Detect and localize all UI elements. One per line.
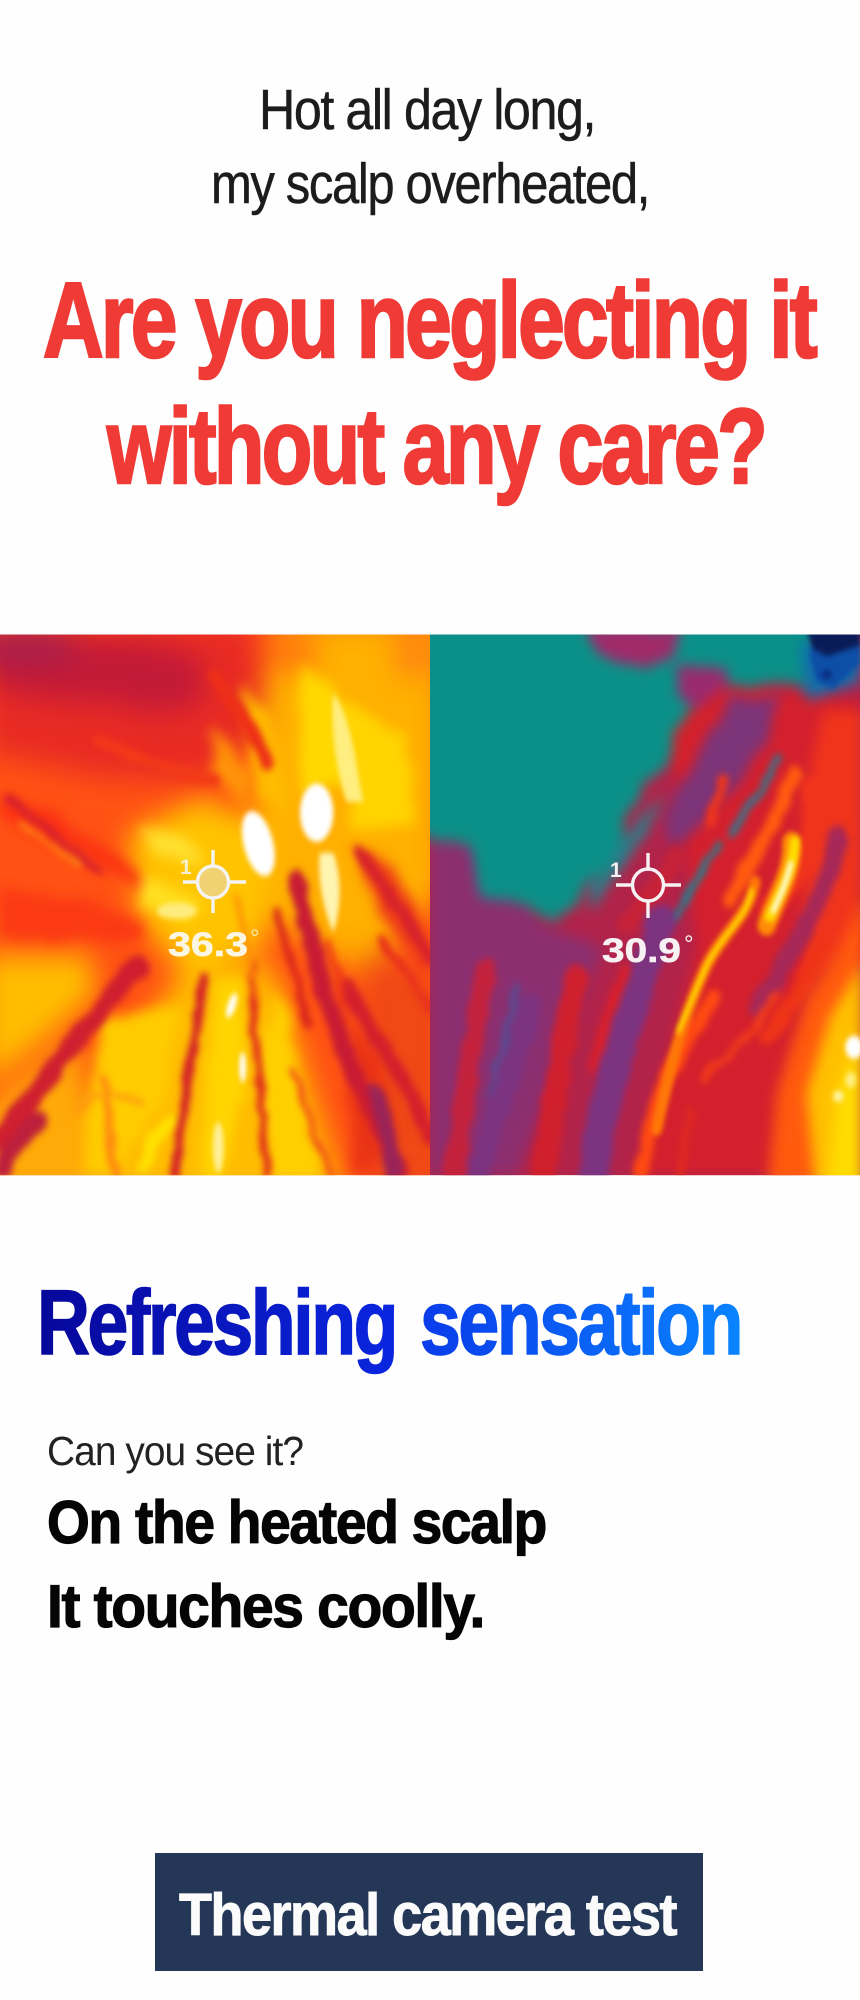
thermal image: after, 30.9 degrees	[430, 634, 860, 1176]
subheading: refreshing sensation: Refreshing	[37, 1272, 396, 1374]
thermal image: before, 36.3 degrees	[0, 620, 443, 1202]
subheading: refreshing sensation	[37, 1272, 741, 1374]
fibres	[453, 758, 838, 1175]
intro text: Hot all day long,	[259, 78, 595, 142]
intro text	[211, 78, 649, 216]
temperature reading 30.9: °	[684, 931, 694, 958]
temperature reading 30.9: 30.9	[602, 932, 681, 970]
body statement: It touches coolly.	[47, 1573, 484, 1640]
body statement	[47, 1489, 546, 1640]
banner: thermal camera test: Thermal camera test	[179, 1882, 677, 1948]
temperature reading 30.9	[602, 859, 694, 970]
crosshair marker 1	[616, 853, 681, 918]
temperature reading 36.3: 1	[180, 856, 192, 879]
temperature reading 36.3: °	[250, 925, 260, 952]
intro text: my scalp overheated,	[211, 152, 649, 216]
subheading: refreshing sensation: sensation	[420, 1272, 741, 1374]
fibres	[0, 675, 430, 1175]
temperature reading 36.3: 36.3	[168, 926, 248, 964]
question text: Can you see it?	[47, 1428, 303, 1474]
body statement: On the heated scalp	[47, 1489, 546, 1556]
crosshair marker 1	[183, 850, 246, 913]
banner: thermal camera test	[155, 1853, 703, 1971]
temperature reading 30.9: 1	[610, 859, 622, 882]
main headline	[43, 260, 817, 506]
temperature reading 36.3	[168, 856, 260, 964]
